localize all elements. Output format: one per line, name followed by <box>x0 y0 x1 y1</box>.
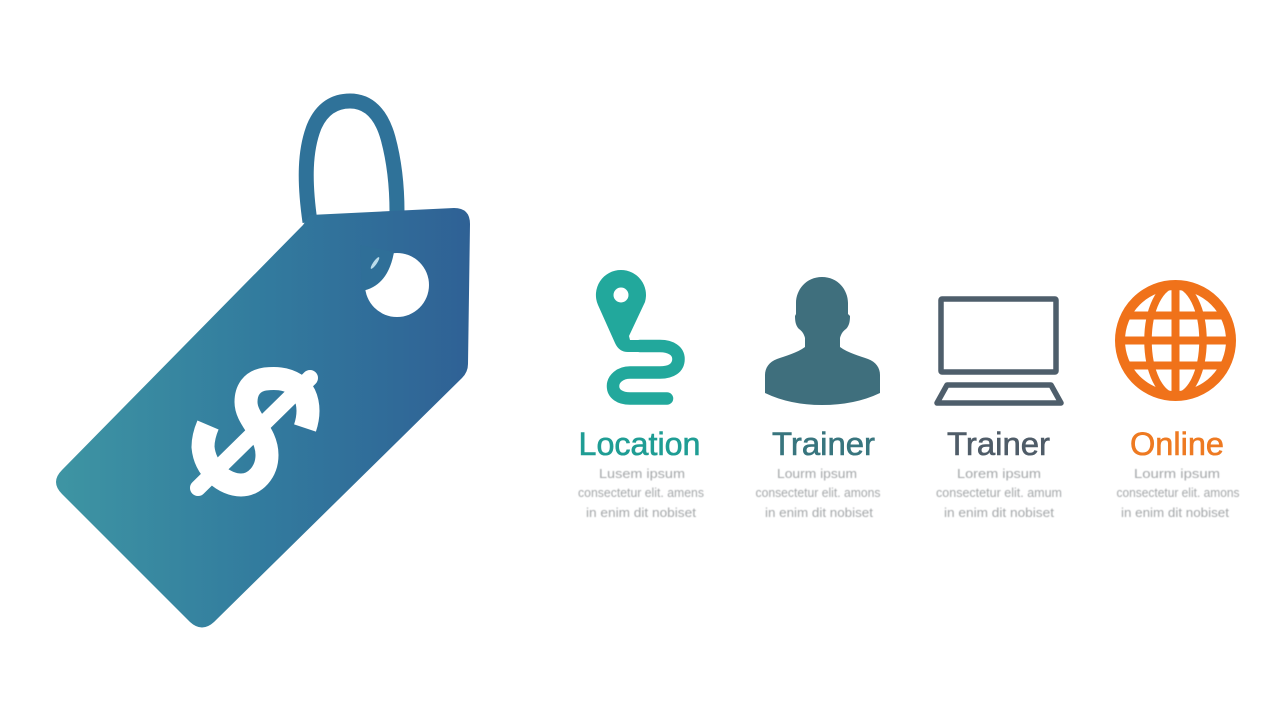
icon: person silhouette <box>765 277 880 405</box>
dollar sign <box>198 378 310 488</box>
description text <box>1116 467 1240 520</box>
string through the hole <box>360 245 394 291</box>
description text: consectetur elit. amons <box>1116 486 1240 500</box>
description text: Lourm ipsum <box>777 467 857 481</box>
column: trainer laptop <box>936 299 1062 520</box>
description text: Lourm ipsum <box>1134 467 1220 481</box>
description text: in enim dit nobiset <box>765 506 874 520</box>
description text: in enim dit nobiset <box>944 506 1055 520</box>
description text <box>936 467 1062 520</box>
icon: laptop <box>937 299 1061 403</box>
heading: Online: Online <box>1130 426 1224 462</box>
price tag icon <box>56 101 470 628</box>
icon: globe <box>1120 284 1231 396</box>
column: location <box>578 270 704 520</box>
tag hole <box>365 253 429 317</box>
heading: Trainer: Trainer <box>772 426 875 462</box>
description text: in enim dit nobiset <box>586 506 697 520</box>
description text <box>578 467 704 520</box>
description text <box>756 467 880 520</box>
description text: Lusem ipsum <box>599 467 685 481</box>
description text: in enim dit nobiset <box>1121 506 1230 520</box>
icon: map pin with route <box>596 270 678 398</box>
column: trainer person <box>756 277 880 520</box>
heading: Location: Location <box>578 426 700 462</box>
description text: consectetur elit. amum <box>936 486 1062 500</box>
description text: consectetur elit. amons <box>756 486 880 500</box>
description text: consectetur elit. amens <box>578 486 704 500</box>
tag loop string <box>306 101 397 222</box>
column: online <box>1116 284 1240 520</box>
tag body <box>56 208 470 628</box>
heading: Trainer: Trainer <box>947 426 1050 462</box>
description text: Lorem ipsum <box>957 467 1041 481</box>
